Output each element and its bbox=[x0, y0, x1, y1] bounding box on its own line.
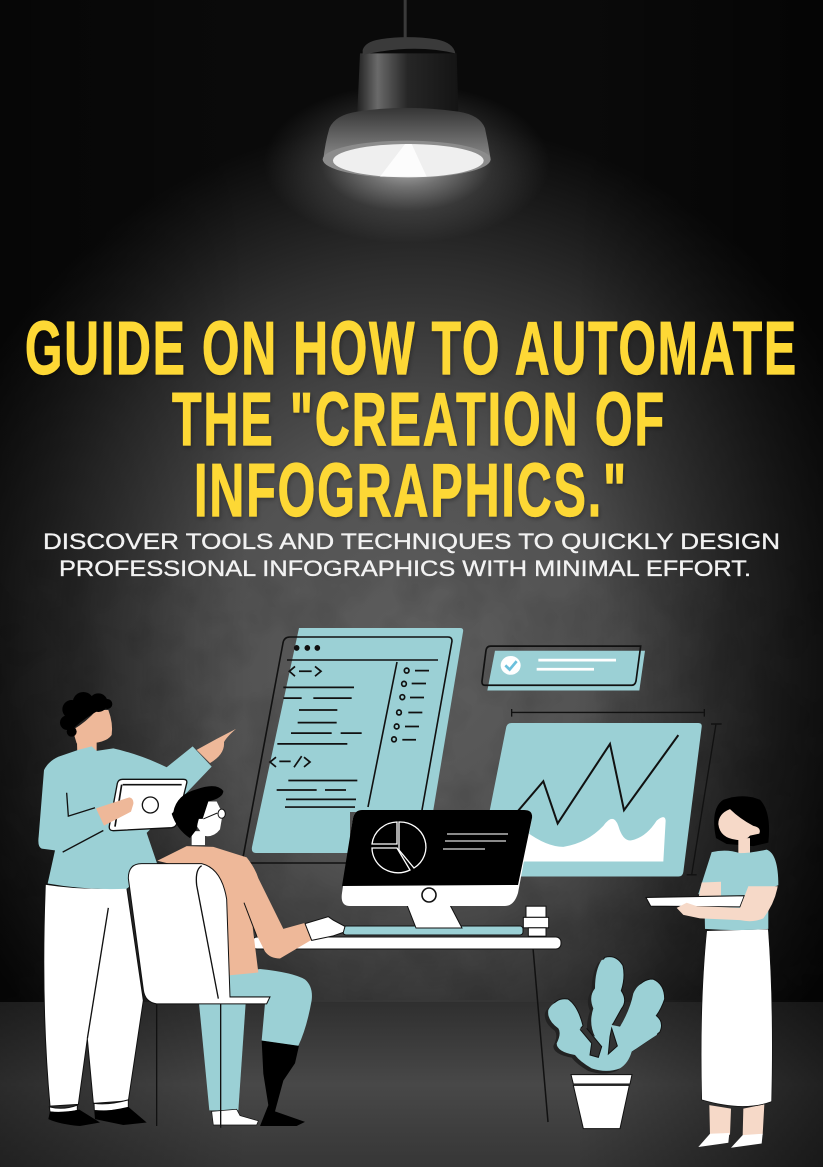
figure: seated man at desk bbox=[128, 786, 345, 1128]
title bbox=[25, 306, 798, 532]
plant back leaves bbox=[551, 957, 665, 1039]
subtitle: PROFESSIONAL INFOGRAPHICS WITH MINIMAL EFFORT. bbox=[59, 556, 751, 581]
figure: standing man with tablet bbox=[38, 692, 236, 1126]
panel: notification card bbox=[482, 646, 645, 690]
panel: code window bbox=[242, 628, 463, 863]
desk leg bbox=[533, 948, 548, 1122]
figure: standing woman with tray bbox=[646, 796, 778, 1148]
plant main foliage bbox=[548, 959, 662, 1071]
plant stems bbox=[580, 1028, 617, 1057]
icon: ceiling lamp bbox=[263, 0, 550, 243]
subtitle bbox=[43, 529, 780, 581]
icon: stacked cups bbox=[523, 906, 549, 936]
icon: potted plant bbox=[545, 957, 665, 1129]
icon: check mark bbox=[501, 656, 521, 675]
chart: line and area panel bbox=[477, 709, 722, 877]
desk with keyboard bbox=[252, 926, 561, 949]
subtitle: DISCOVER TOOLS AND TECHNIQUES TO QUICKLY DESIGN bbox=[43, 529, 780, 554]
icon: computer monitor with pie chart bbox=[342, 810, 532, 928]
plant shadow bbox=[545, 962, 658, 1073]
